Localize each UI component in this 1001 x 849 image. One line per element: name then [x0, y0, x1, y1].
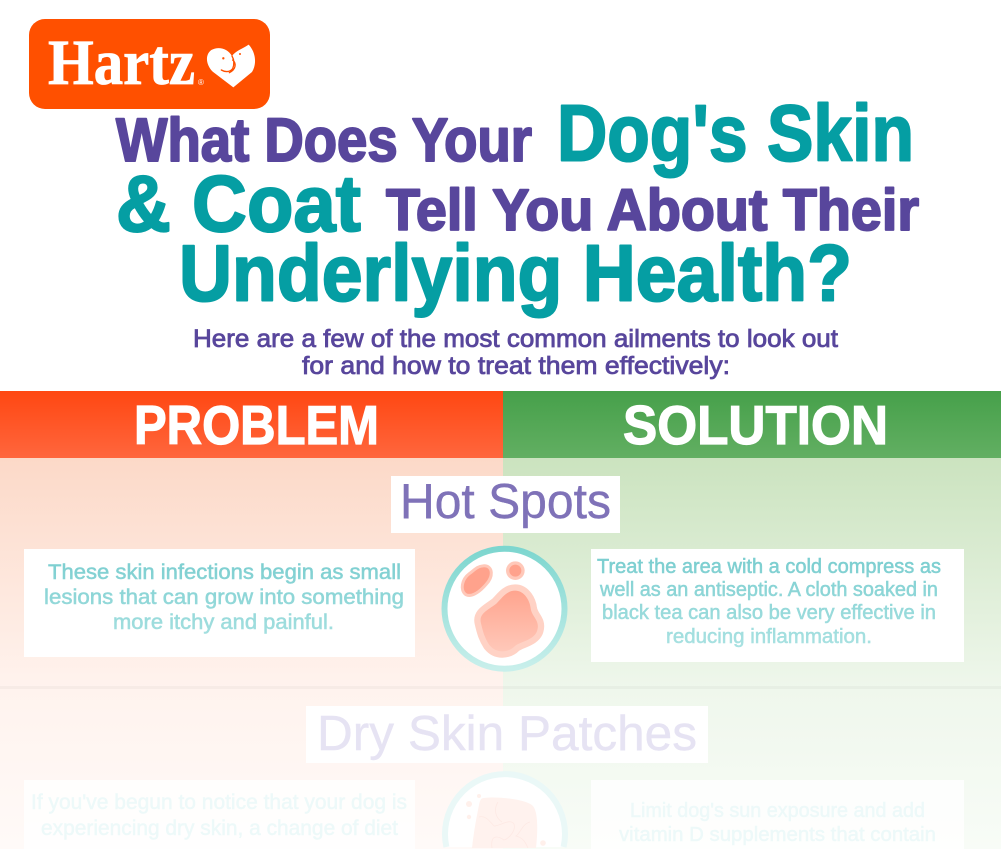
logo: Hartz: ®: [198, 78, 204, 87]
icon: hot spots skin lesions: [444, 549, 564, 669]
subtitle: [193, 325, 838, 380]
subtitle: Here are a few of the most common ailments to look out: [193, 325, 838, 353]
text block: hot spots solution: [591, 549, 964, 662]
header: solution: [503, 391, 1001, 458]
title: What Does Your: [116, 106, 532, 174]
text block: dry skin problem: If you've begun to notice that your dog is: [31, 791, 407, 814]
title: Dog's Skin: [557, 88, 914, 178]
text block: hot spots solution: reducing inflammation.: [666, 626, 872, 648]
header: problem: [0, 391, 503, 458]
text block: hot spots solution: black tea can also be very effective in: [602, 602, 936, 624]
heading: Dry Skin Patches: Dry Skin Patches: [317, 707, 697, 761]
logo: Hartz: Hartz: [48, 27, 195, 99]
panel: problem column background: [0, 458, 503, 849]
text block: hot spots solution: Treat the area with a cold compress as: [597, 556, 941, 578]
text block: dry skin solution: vitamin D supplements that contain: [619, 824, 936, 846]
text block: dry skin solution: Limit dog's sun exposure and add: [630, 800, 925, 822]
text block: dry skin problem: [24, 780, 415, 849]
text block: hot spots problem: lesions that can grow into something: [44, 586, 404, 609]
text block: dry skin problem: experiencing dry skin, a change of diet: [41, 817, 398, 840]
subtitle: for and how to treat them effectively:: [302, 352, 730, 380]
icon: dog and cat heart: [207, 45, 255, 87]
title: Underlying Health?: [179, 228, 852, 318]
panel: solution column background: [503, 458, 1001, 849]
heading: Hot Spots: Hot Spots: [400, 475, 611, 529]
title: & Coat: [116, 159, 361, 248]
icon: dry skin patch: [445, 774, 565, 848]
title: Tell You About Their: [386, 178, 919, 243]
text block: dry skin solution: [591, 780, 964, 849]
header: problem: PROBLEM: [134, 394, 379, 456]
text block: hot spots problem: [24, 549, 415, 657]
text block: hot spots solution: well as an antiseptic. A cloth soaked in: [599, 579, 938, 601]
title: [116, 88, 919, 318]
text block: hot spots problem: These skin infections begin as small: [48, 561, 401, 584]
logo: Hartz: [29, 19, 270, 109]
text block: hot spots problem: more itchy and painful.: [113, 611, 334, 634]
header: solution: SOLUTION: [623, 394, 888, 456]
